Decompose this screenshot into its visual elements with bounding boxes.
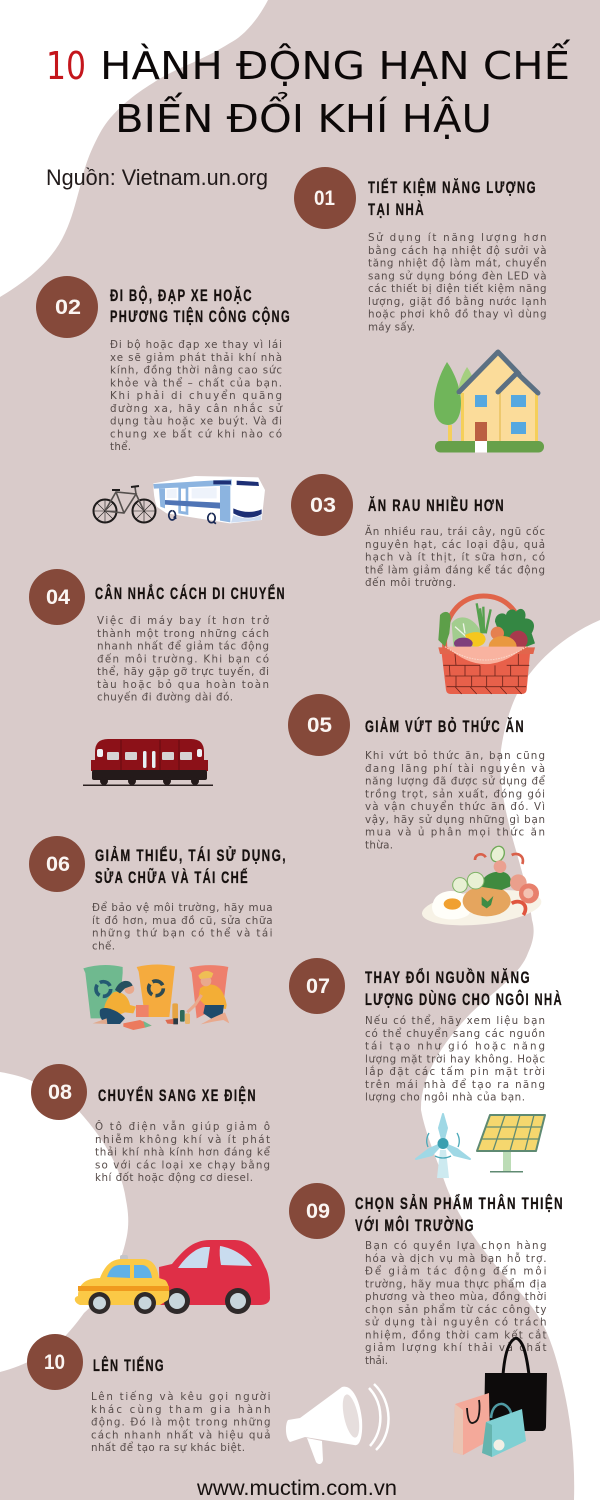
heading 07: THAY ĐỔI NGUỒN NĂNG — [365, 968, 531, 987]
body 08: thải khí nhà kính hơn đáng kể — [95, 1146, 271, 1158]
body 05: và vận chuyển thức ăn đó. Vì — [365, 800, 545, 813]
body 09: giảm lượng khí thải và chất — [365, 1342, 546, 1354]
body 04: đến môi trường. Khi bạn có — [97, 653, 269, 665]
body 09: Bạn có quyền lựa chọn hàng — [365, 1240, 546, 1252]
icon: solar panel — [477, 1115, 545, 1172]
body 06: những thứ bạn có thể và tái — [92, 926, 272, 940]
body 10 — [91, 1391, 270, 1454]
heading 02: ĐI BỘ, ĐẠP XE HOẶC — [110, 286, 253, 305]
number badge 07: 07 — [306, 975, 330, 998]
body 07: có thể chuyển sang các nguồn — [365, 1027, 545, 1040]
body 06: chế. — [92, 940, 115, 952]
number badge 07 — [289, 958, 345, 1014]
body 03: đến môi trường. — [365, 577, 456, 589]
heading 10: LÊN TIẾNG — [93, 1356, 165, 1375]
body 05 — [365, 750, 546, 851]
item 01 — [294, 167, 546, 333]
body 10: nhất để tạo ra sự khác biệt. — [91, 1441, 245, 1454]
heading 09 — [355, 1194, 564, 1235]
body 07: Nếu có thể, hãy xem liệu bạn — [365, 1014, 545, 1027]
heading 07 — [365, 968, 563, 1009]
item 02 — [36, 276, 291, 453]
body 08: khí đốt hoặc động cơ diesel. — [95, 1172, 253, 1184]
number badge 04 — [29, 569, 85, 625]
body 08 — [95, 1120, 271, 1184]
body 03: nguyên hạt, các loại đậu, quả — [365, 539, 545, 551]
body 01: tăng nhiệt độ làm mát, chuyển — [368, 256, 546, 270]
body 09 — [365, 1240, 546, 1367]
number badge 09: 09 — [306, 1200, 330, 1223]
body 09: phương và theo mùa, đồng thời — [365, 1291, 546, 1303]
item 09 — [289, 1183, 564, 1367]
heading 03: ĂN RAU NHIỀU HƠN — [368, 496, 505, 515]
item 06 — [29, 836, 287, 952]
icon: food plate — [420, 844, 543, 931]
body 01: Sử dụng ít năng lượng hơn — [368, 232, 546, 244]
body 10: cách nhanh nhất và hiệu quả — [91, 1429, 270, 1441]
number badge 10: 10 — [44, 1351, 65, 1374]
number badge 01: 01 — [314, 187, 335, 210]
heading 06 — [95, 846, 287, 887]
body 05: vậy, hãy sử dụng những gì bạn — [365, 814, 545, 826]
body 04: nhanh nhất để giảm tác động — [97, 640, 269, 652]
title: 10 — [46, 44, 86, 89]
icon: wind turbine — [416, 1114, 470, 1178]
number badge 03: 03 — [310, 494, 336, 517]
number badge 06 — [29, 836, 85, 892]
number badge 03 — [291, 474, 353, 536]
heading 02: PHƯƠNG TIỆN CÔNG CỘNG — [110, 307, 291, 326]
number badge 05: 05 — [307, 714, 332, 737]
number badge 09 — [289, 1183, 345, 1239]
body 02: kính, đồng thời nâng cao sức — [110, 364, 282, 376]
number badge 02: 02 — [55, 296, 81, 319]
body 08: nhiễm không khí và ít phát — [95, 1133, 270, 1146]
body 04: chuyến đi đường dài đó. — [97, 692, 233, 704]
body 02: thể. — [110, 440, 131, 453]
icon: shopping bags — [453, 1338, 547, 1457]
body 01: sang sử dụng bóng đèn LED và — [368, 270, 546, 282]
number badge 02 — [36, 276, 98, 338]
body 01: lượng, giặt đồ bằng nước lạnh — [368, 295, 546, 308]
icon: megaphone — [286, 1384, 389, 1464]
body 07: tái tạo như gió hoặc năng — [365, 1040, 545, 1052]
body 02: xe sẽ giảm phát thải khí nhà — [110, 352, 282, 364]
title: BIẾN ĐỔI KHÍ HẬU — [115, 91, 492, 142]
icon: recycling bins — [83, 964, 229, 1030]
footer url: www.muctim.com.vn — [196, 1477, 397, 1500]
body 04: Việc đi máy bay ít hơn trở — [97, 615, 270, 627]
body 07: trên mái nhà để tạo ra năng — [365, 1078, 545, 1091]
body 09: thải. — [365, 1355, 388, 1367]
number badge 08: 08 — [48, 1081, 72, 1104]
body 02: đường xa, hãy cân nhắc sử — [110, 402, 282, 415]
body 01: các thiết bị điện tiết kiệm năng — [368, 283, 546, 295]
item 03 — [291, 474, 545, 589]
item 05 — [288, 694, 546, 851]
body 10: động. Đó là một trong những — [91, 1416, 270, 1428]
body 05: trồng trọt, sản xuất, đóng gói — [365, 788, 545, 800]
body 03 — [365, 525, 545, 589]
body 09: chọn sản phẩm từ các công ty — [365, 1303, 546, 1316]
body 07 — [365, 1014, 545, 1104]
body 02: dụng tàu hoặc xe buýt. Và đi — [110, 416, 282, 428]
body 07: lượng mặt trời hay không. Hoặc — [365, 1053, 545, 1065]
body 01: hoặc phơi khô đồ thay vì dùng — [368, 308, 546, 320]
body 04 — [97, 615, 270, 704]
icon: bicycle — [94, 486, 156, 522]
body 09: sử dụng tài nguyên có trách — [365, 1316, 546, 1328]
title — [46, 38, 571, 142]
item 07 — [289, 958, 563, 1104]
body 02: Khi phải di chuyển quãng — [110, 389, 282, 402]
icon: cars — [75, 1240, 270, 1314]
body 04: thành một trong những cách — [97, 628, 269, 640]
body 08: Ô tô điện vẫn giúp giảm ô — [95, 1120, 270, 1133]
number badge 06: 06 — [46, 853, 70, 876]
heading 02 — [110, 286, 291, 326]
heading 01 — [368, 178, 537, 219]
heading 09: VỚI MÔI TRƯỜNG — [355, 1216, 475, 1235]
title: HÀNH ĐỘNG HẠN CHẾ — [100, 38, 571, 89]
number badge 05 — [288, 694, 350, 756]
item 04 — [29, 569, 286, 704]
body 08: so với các loại xe chạy bằng — [95, 1158, 270, 1171]
body 06 — [92, 901, 272, 952]
heading 04: CÂN NHẮC CÁCH DI CHUYỂN — [95, 584, 286, 603]
icon: vegetable basket — [438, 596, 535, 694]
body 01: bằng cách hạ nhiệt độ sưởi và — [368, 244, 546, 257]
body 06: ít đồ hơn, mua đồ cũ, sửa chữa — [92, 915, 272, 927]
number badge 08 — [31, 1064, 87, 1120]
body 09: nhiệm, đồng thời cam kết cắt — [365, 1328, 546, 1341]
body 05: mua và ủ phân mọi thức ăn — [365, 826, 545, 838]
heading 08: CHUYỂN SANG XE ĐIỆN — [98, 1086, 257, 1105]
item 08 — [31, 1064, 271, 1184]
body 02: chung xe bất cứ khi nào có — [110, 428, 282, 440]
body 09: trường, hãy mua thực phẩm địa — [365, 1277, 546, 1290]
body 05: đang lãng phí tài nguyên và — [365, 763, 545, 775]
body 04: thể, hãy gặp gỡ trực tuyến, đi — [97, 665, 269, 678]
number badge 10 — [27, 1334, 83, 1390]
heading 01: TẠI NHÀ — [368, 200, 425, 219]
body 05: thừa. — [365, 839, 393, 851]
body 03: Ăn nhiều rau, trái cây, ngũ cốc — [365, 525, 545, 538]
body 03: hạch và ít thịt, ít sữa hơn, có — [365, 552, 545, 564]
item 10 — [27, 1334, 270, 1454]
body 01: máy sấy. — [368, 321, 415, 333]
body 05: Khi vứt bỏ thức ăn, bạn cũng — [365, 750, 545, 762]
heading 06: GIẢM THIỂU, TÁI SỬ DỤNG, — [95, 846, 287, 865]
number badge 04: 04 — [46, 586, 70, 609]
body 07: lượng cho ngôi nhà của bạn. — [365, 1092, 525, 1104]
body 05: năng lượng đã được sử dụng để — [365, 774, 546, 788]
body 01 — [368, 232, 546, 333]
icon: train — [83, 739, 213, 786]
heading 06: SỬA CHỮA VÀ TÁI CHẾ — [95, 867, 249, 887]
source line: Nguồn: Vietnam.un.org — [46, 165, 268, 190]
heading 05: GIẢM VỨT BỎ THỨC ĂN — [365, 717, 525, 736]
number badge 01 — [294, 167, 356, 229]
body 10: khác cùng tham gia hành — [91, 1404, 270, 1416]
body 03: thể làm giảm đáng kể tác động — [365, 563, 545, 576]
body 04: tàu hoặc bỏ qua hoàn toàn — [97, 679, 269, 691]
body 06: Để bảo vệ môi trường, hãy mua — [92, 901, 272, 914]
icon: bus — [153, 476, 265, 524]
body 09: hóa và dịch vụ mà bạn hỗ trợ. — [365, 1252, 546, 1265]
icon: house — [434, 352, 544, 452]
body 09: Để giảm tác động đến môi — [365, 1264, 546, 1278]
body 10: Lên tiếng và kêu gọi người — [91, 1391, 270, 1403]
body 02: Đi bộ hoặc đạp xe thay vì lái — [110, 339, 282, 351]
body 02: khỏe và thể – chất của bạn. — [110, 376, 282, 389]
body 07: lắp đặt các tấm pin mặt trời — [365, 1065, 545, 1078]
body 02 — [110, 339, 282, 453]
